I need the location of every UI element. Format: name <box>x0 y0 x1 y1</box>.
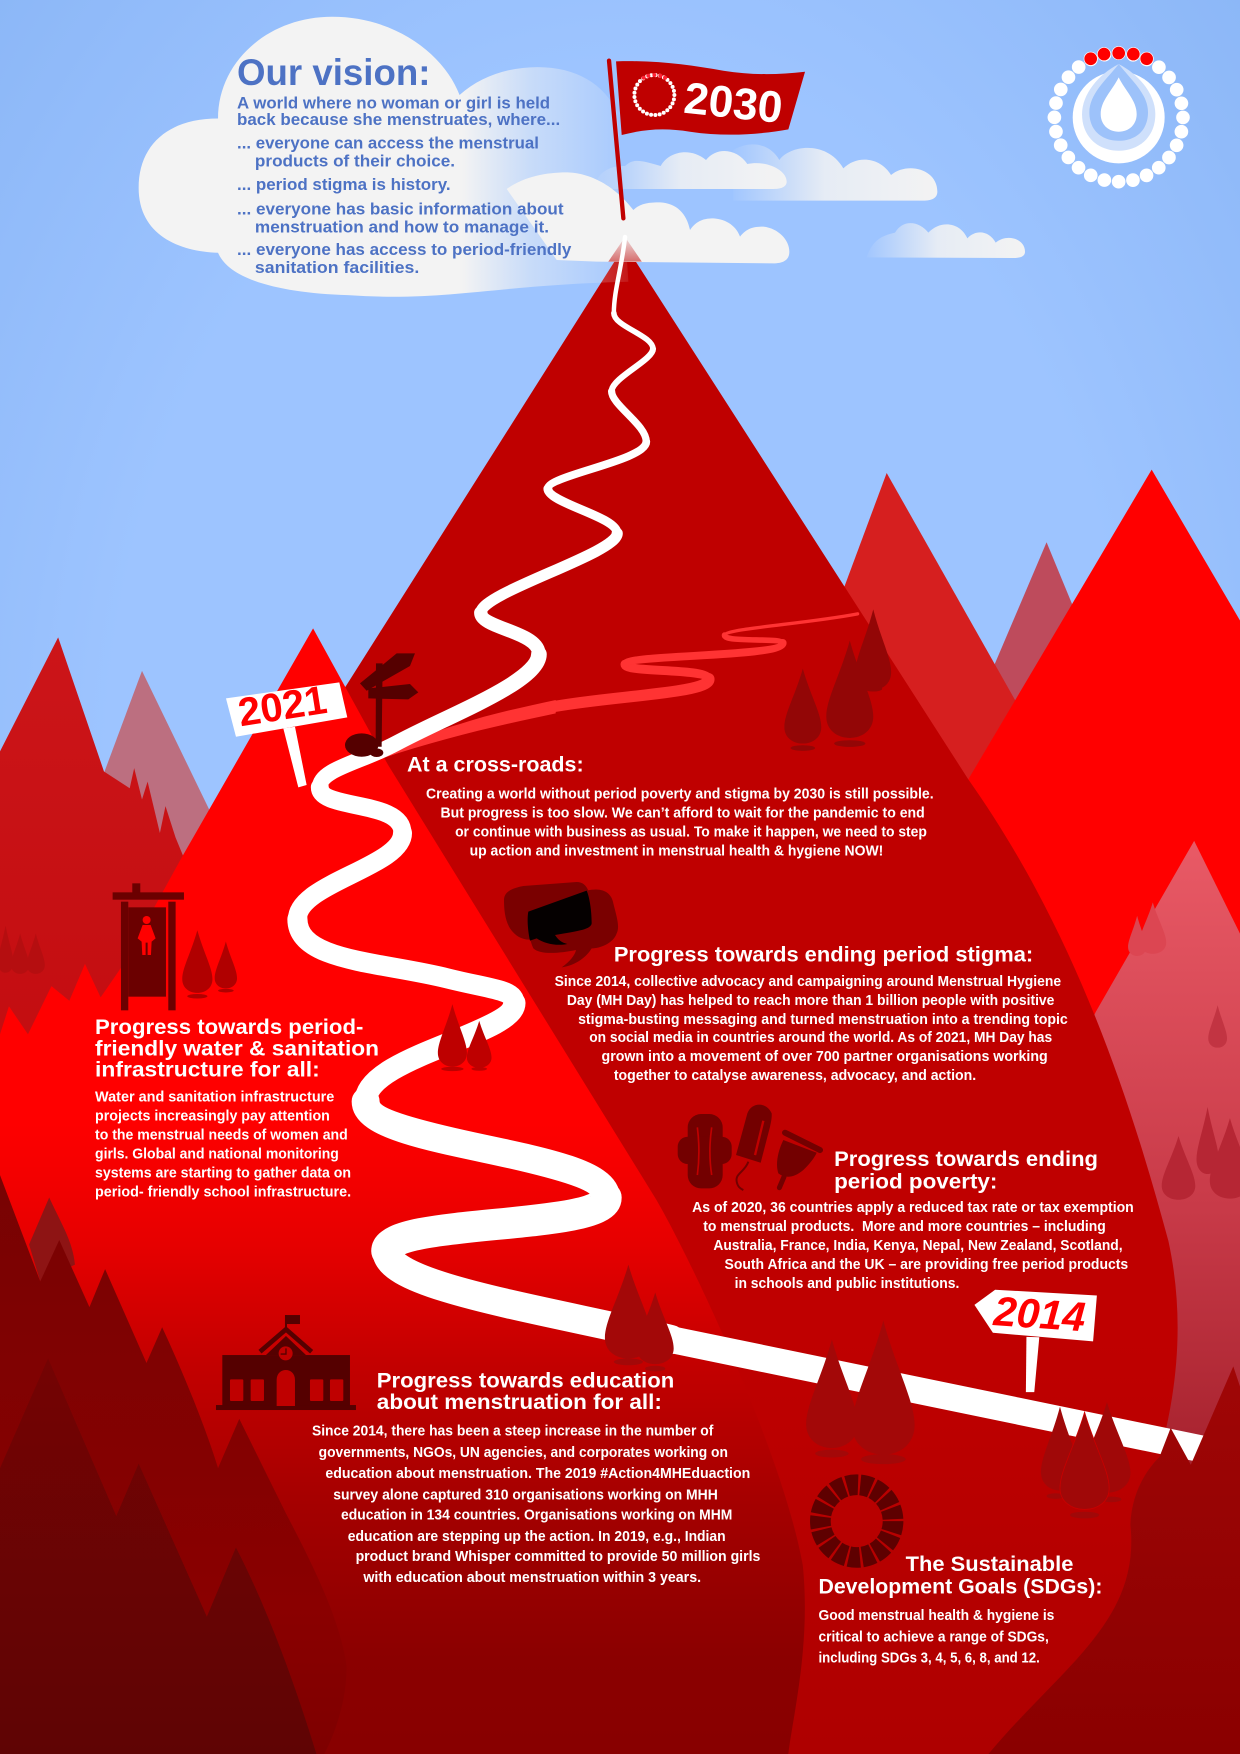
cloud: lower, over the peak <box>507 172 789 263</box>
main vision cloud <box>139 17 628 297</box>
side road <box>377 614 858 760</box>
mountain: left dark red <box>0 637 224 1118</box>
cloud: behind flag left <box>595 151 787 189</box>
vision text block: menstruation and how to manage it. <box>255 219 549 237</box>
sign: 2021: 2021 <box>235 678 330 735</box>
vision text block: products of their choice. <box>255 153 455 171</box>
education text: survey alone captured 310 organisations working on MHH <box>333 1486 718 1503</box>
SDG text: Good menstrual health & hygiene is <box>818 1607 1054 1624</box>
distant mountains <box>67 473 1129 928</box>
road to 2030 <box>297 237 1219 1452</box>
SDG text <box>818 1552 1102 1667</box>
education text: about menstruation for all: <box>377 1390 662 1414</box>
flag cloth <box>616 61 805 135</box>
sign: 2014: 2014 <box>991 1288 1087 1340</box>
dark foreground mountains left <box>0 1175 347 1754</box>
sign: 2021 <box>226 678 347 787</box>
vision text block: ... everyone can access the menstrual <box>237 135 539 153</box>
education text: education in 134 countries. Organisations working on MHM <box>341 1507 732 1524</box>
period stigma text: Since 2014, collective advocacy and campaigning around Menstrual Hygiene <box>555 973 1061 990</box>
vision text block: ... everyone has access to period-friendly <box>237 241 571 259</box>
water and sanitation text: period- friendly school infrastructure. <box>95 1183 351 1200</box>
cloud: far right small <box>867 223 1025 258</box>
education text: governments, NGOs, UN agencies, and corporates working on <box>319 1444 728 1461</box>
period stigma text: Day (MH Day) has helped to reach more than 1 billion people with positive <box>567 992 1054 1009</box>
vision heading: Our vision: <box>237 52 430 93</box>
period poverty text: period poverty: <box>834 1170 997 1194</box>
vision text block <box>237 52 571 277</box>
icon: school <box>216 1315 356 1410</box>
cross-roads text <box>407 753 934 859</box>
SDG text: including SDGs 3, 4, 5, 6, 8, and 12. <box>818 1650 1040 1667</box>
period poverty text <box>692 1147 1134 1292</box>
trees: upper right <box>784 609 891 751</box>
period poverty text: Australia, France, India, Kenya, Nepal, New Zealand, Scotland, <box>713 1237 1123 1254</box>
SDG text: critical to achieve a range of SDGs, <box>818 1628 1049 1645</box>
water and sanitation text: girls. Global and national monitoring <box>95 1145 339 1162</box>
education text: Since 2014, there has been a steep increase in the number of <box>312 1423 714 1440</box>
heading: Progress towards ending period stigma: <box>614 943 1033 967</box>
mountain peak seen through cloud <box>608 237 642 262</box>
mountain: pink right <box>1051 841 1240 1476</box>
education text: product brand Whisper committed to provide 50 million girls <box>356 1548 760 1565</box>
pad <box>678 1114 732 1188</box>
water and sanitation text: projects increasingly pay attention <box>95 1107 330 1124</box>
cross-roads text: Creating a world without period poverty and stigma by 2030 is still possible. <box>426 785 934 802</box>
cross-roads text: up action and investment in menstrual health & hygiene NOW! <box>470 842 883 859</box>
SDG text: Development Goals (SDGs): <box>818 1574 1102 1598</box>
icon: speech bubbles <box>504 882 618 967</box>
vision text block: back because she menstruates, where... <box>237 111 560 129</box>
flag 2030 <box>609 61 805 218</box>
flag logo ring <box>634 73 674 115</box>
heading: Progress towards education <box>377 1369 674 1393</box>
cup <box>777 1133 820 1188</box>
water and sanitation text: infrastructure for all: <box>95 1058 320 1082</box>
signpost crossroads <box>345 653 418 757</box>
period stigma text: on social media in countries around the world. As of 2021, MH Day has <box>589 1029 1052 1046</box>
dark foreground mountain right <box>988 1366 1240 1754</box>
logo: drop in bead ring <box>1054 46 1183 182</box>
flag year: 2030 <box>682 74 785 133</box>
mountain: bright red 2021 foothill <box>0 628 805 1754</box>
water and sanitation text: to the menstrual needs of women and <box>95 1126 348 1143</box>
heading: At a cross-roads: <box>407 753 584 777</box>
period poverty text: in schools and public institutions. <box>735 1275 959 1292</box>
cross-roads text: or continue with business as usual. To make it happen, we need to step <box>455 823 927 840</box>
trees: on the road <box>605 1265 915 1464</box>
faint trees on pink mountain <box>1128 902 1240 1200</box>
cross-roads text: But progress is too slow. We can’t afford to wait for the pandemic to end <box>441 804 925 821</box>
trees: beside road <box>438 1004 492 1071</box>
period stigma text <box>555 943 1068 1084</box>
icon: menstrual products <box>678 1105 820 1190</box>
main mountain <box>313 245 1178 1754</box>
trees: lower right <box>1041 1402 1130 1518</box>
sign: 2014 <box>974 1288 1097 1392</box>
education text: with education about menstruation within 3 years. <box>362 1569 701 1586</box>
period poverty text: to menstrual products. More and more countries – including <box>703 1218 1106 1235</box>
flag pole <box>609 61 623 218</box>
education text: education are stepping up the action. In 2019, e.g., Indian <box>348 1528 726 1545</box>
small trees far left <box>0 926 45 974</box>
period stigma text: stigma-busting messaging and turned menstruation into a trending topic <box>578 1011 1068 1028</box>
clouds <box>139 17 1025 297</box>
water and sanitation text: systems are starting to gather data on <box>95 1164 351 1181</box>
heading: Progress towards ending <box>834 1147 1098 1171</box>
vision text block: ... period stigma is history. <box>237 176 451 194</box>
vision text block: A world where no woman or girl is held <box>237 94 550 112</box>
cloud: upper right <box>733 144 937 201</box>
trees: beside toilet <box>182 930 237 998</box>
period poverty text: South Africa and the UK – are providing free period products <box>725 1256 1128 1273</box>
education text <box>312 1369 760 1586</box>
education text: education about menstruation. The 2019 #Action4MHEduaction <box>325 1465 750 1482</box>
period stigma text: together to catalyse awareness, advocacy, and action. <box>614 1067 976 1084</box>
vision text block: sanitation facilities. <box>255 259 419 277</box>
period stigma text: grown into a movement of over 700 partner organisations working <box>602 1048 1048 1065</box>
period poverty text: As of 2020, 36 countries apply a reduced tax rate or tax exemption <box>692 1199 1134 1216</box>
heading: The Sustainable <box>906 1552 1074 1576</box>
vision text block: ... everyone has basic information about <box>237 201 564 219</box>
water and sanitation text: friendly water & sanitation <box>95 1037 379 1061</box>
tampon <box>736 1105 772 1190</box>
mountain: bright red right <box>894 470 1240 1073</box>
icon: SDG wheel <box>820 1485 893 1557</box>
water and sanitation text: Water and sanitation infrastructure <box>95 1088 334 1105</box>
icon: toilet cabin <box>113 883 184 1010</box>
water and sanitation text <box>95 1015 379 1200</box>
heading: Progress towards period- <box>95 1015 363 1039</box>
